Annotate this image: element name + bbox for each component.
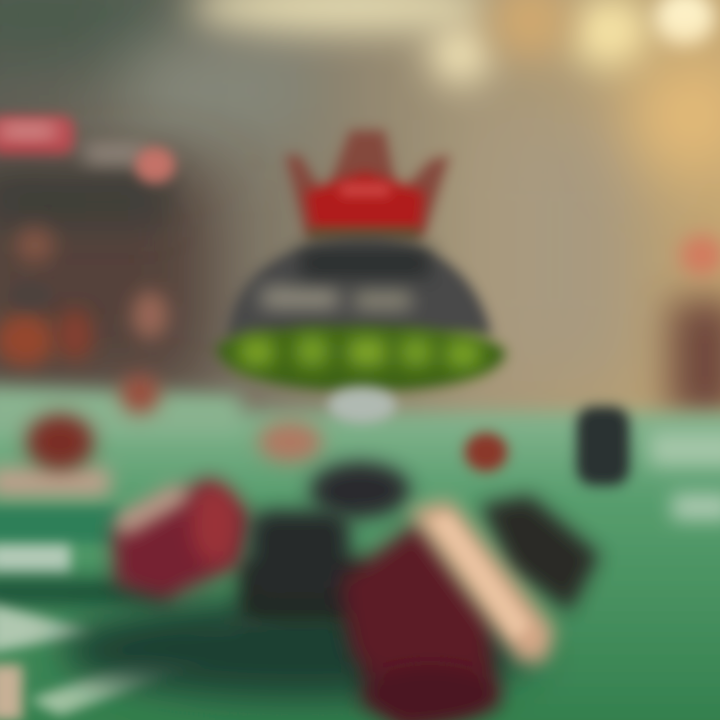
background: golden lights	[190, 0, 720, 175]
badge: dark dome with green band	[216, 238, 506, 423]
icon: crown	[285, 130, 450, 240]
background: red stadium banners	[0, 116, 720, 366]
small chips: scattered background	[26, 374, 630, 486]
chips: foreground pile	[60, 462, 600, 720]
table: green felt	[0, 385, 720, 720]
